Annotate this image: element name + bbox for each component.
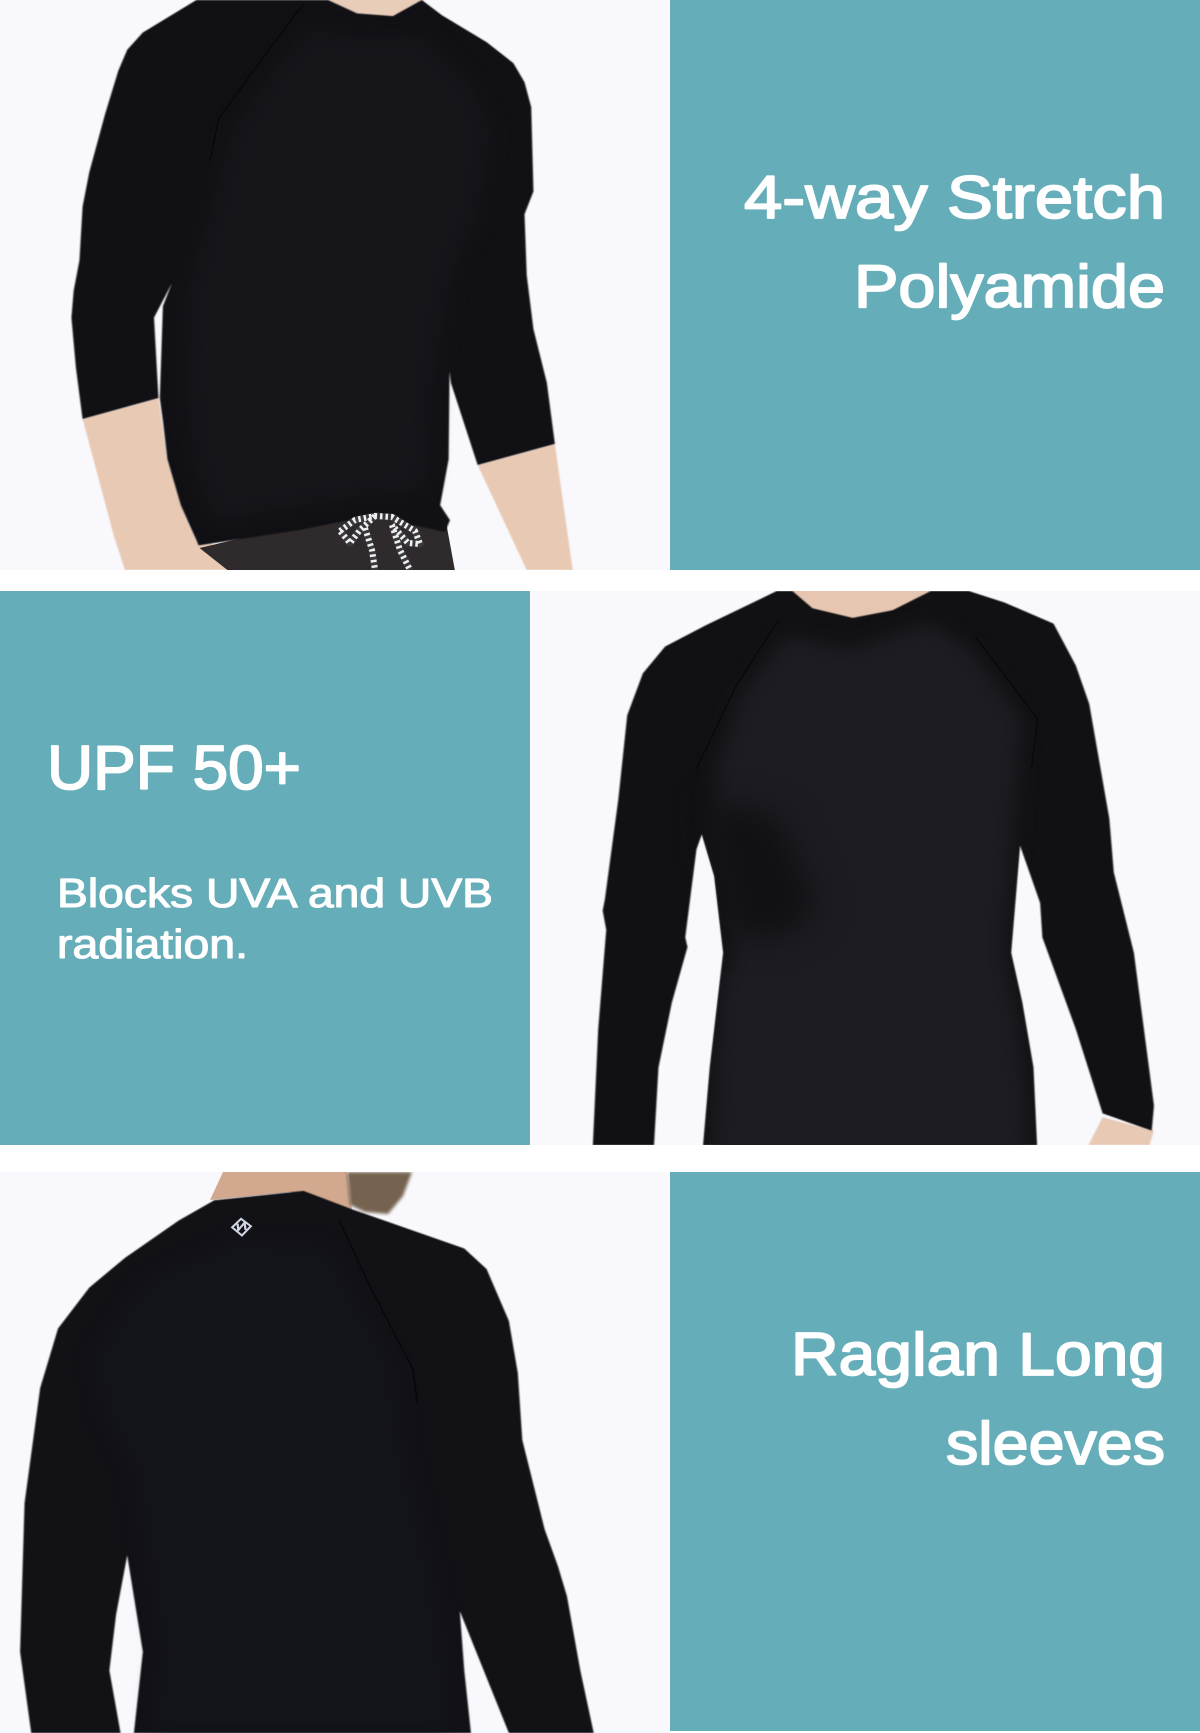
left forearm [83, 398, 228, 570]
heading: Polyamide [854, 253, 1165, 320]
right forearm [478, 444, 573, 570]
teal block [670, 1172, 1200, 1731]
shorts [200, 519, 455, 570]
heading: UPF 50+ [47, 734, 301, 803]
photo: side view of man in black shirt [70, 0, 574, 570]
back shading [147, 1732, 456, 1733]
drawstring [340, 516, 420, 570]
neck [328, 0, 424, 16]
chest shadow [705, 800, 817, 937]
teal block [670, 0, 1200, 570]
raglan seam [210, 4, 304, 161]
hand [1088, 1117, 1154, 1145]
raglan seam [696, 620, 1038, 769]
description [57, 870, 493, 967]
front panel [710, 622, 1029, 1167]
heading: 4-way Stretch [744, 164, 1165, 231]
description: Blocks UVA and UVB [57, 870, 493, 916]
photo: front view of man in black shirt [592, 591, 1156, 1145]
raglan seam [339, 1221, 417, 1403]
neck [210, 1172, 352, 1210]
logo [232, 1219, 251, 1236]
heading: Raglan Long [791, 1321, 1165, 1388]
shirt [20, 1191, 594, 1733]
beard [347, 1172, 412, 1214]
heading: sleeves [946, 1410, 1165, 1477]
shirt [71, 0, 555, 545]
shirt shading [705, 622, 1029, 1167]
shirt front shading [183, 27, 491, 520]
description: radiation. [57, 921, 248, 967]
photo: back view of man in black shirt [18, 1172, 595, 1733]
neck [790, 591, 930, 618]
heading [744, 164, 1165, 320]
panel: raglan long sleeves [0, 1172, 1200, 1733]
panel: 4-way stretch [0, 0, 1200, 570]
shirt [593, 591, 1154, 1145]
panel: UPF 50+ [0, 591, 1200, 1167]
teal block [0, 591, 530, 1145]
heading [791, 1321, 1165, 1477]
